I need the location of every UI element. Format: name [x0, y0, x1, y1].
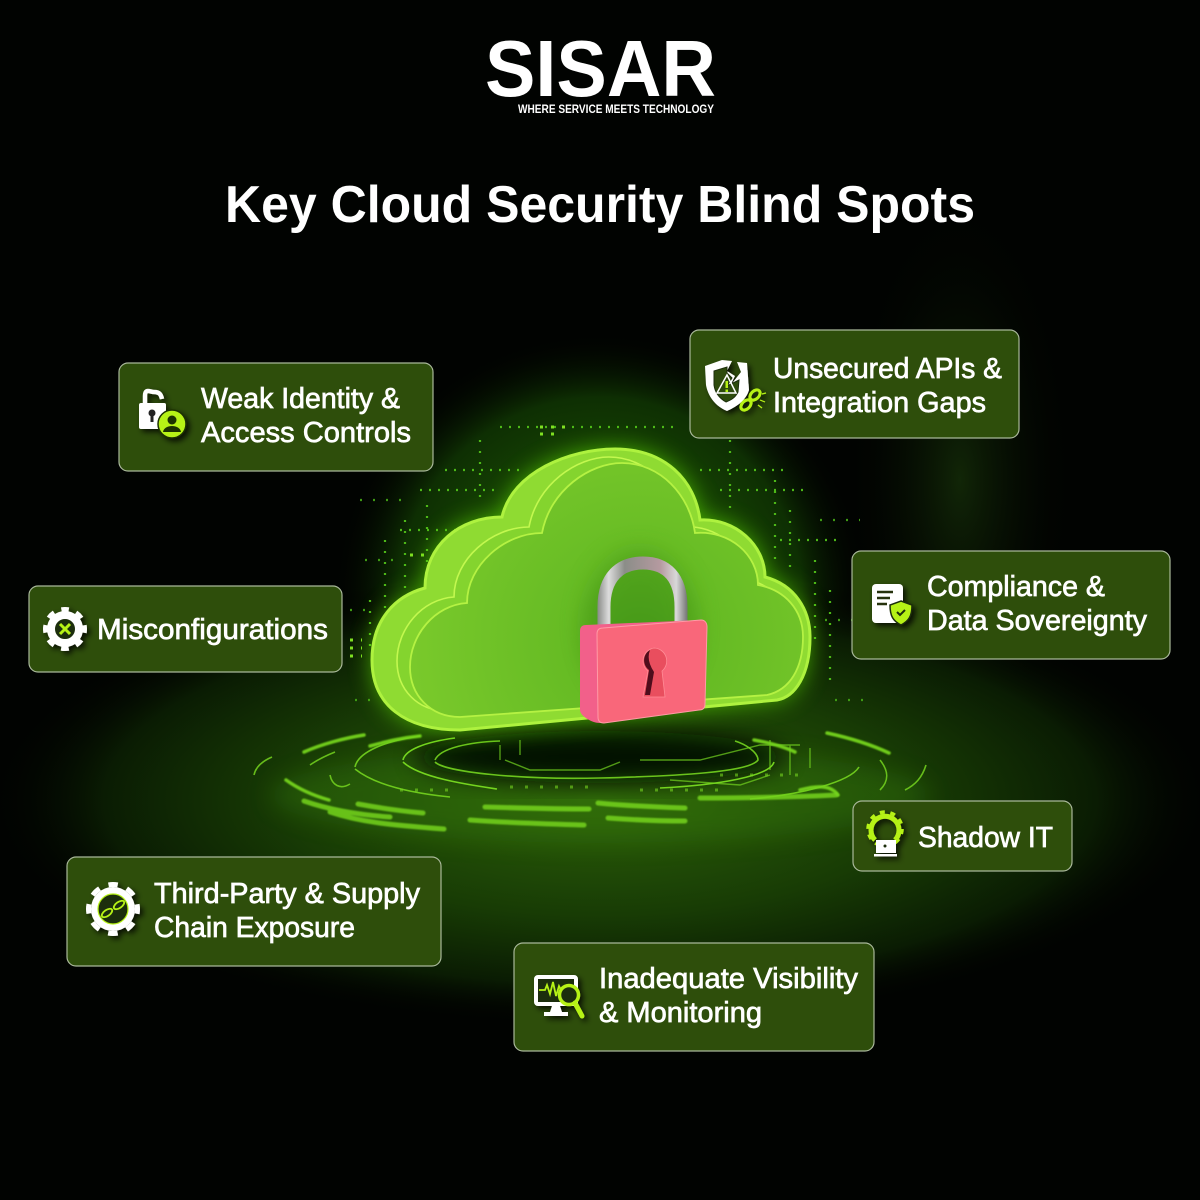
- text: Access Controls: [201, 417, 411, 449]
- text: [927, 571, 1147, 637]
- text: & Monitoring: [599, 997, 762, 1029]
- text: [201, 383, 411, 449]
- text: Unsecured APIs &: [773, 353, 1002, 385]
- keyhole: [643, 648, 667, 697]
- circuit rings: [254, 731, 930, 843]
- panel: misconfigurations: [29, 586, 342, 672]
- panel: compliance: [852, 551, 1170, 659]
- panel: shadow IT: [853, 801, 1072, 871]
- text: [773, 353, 1002, 419]
- text: Chain Exposure: [154, 912, 355, 944]
- text: Compliance &: [927, 571, 1105, 603]
- icon: cracked shield with broken chain: [705, 360, 766, 412]
- icon: gear with chain: [88, 884, 138, 934]
- text: Shadow IT: [918, 822, 1053, 854]
- cloud glow: [372, 449, 810, 730]
- icon: document with shield: [872, 584, 912, 625]
- text: Third-Party & Supply: [154, 878, 420, 910]
- icon: gear bulb with laptop: [868, 812, 902, 856]
- text: Inadequate Visibility: [599, 963, 858, 995]
- logo: SISAR: SISAR: [485, 24, 716, 113]
- panel: visibility: [514, 943, 874, 1051]
- padlock: [580, 550, 707, 723]
- text: Data Sovereignty: [927, 605, 1147, 637]
- panel: third-party: [67, 857, 441, 966]
- icon: gear with x: [46, 610, 84, 648]
- logo: SISAR: WHERE SERVICE MEETS TECHNOLOGY: [518, 104, 714, 116]
- data particles: [350, 427, 870, 700]
- text: [154, 878, 420, 944]
- text: Integration Gaps: [773, 387, 986, 419]
- icon: monitor with magnifier: [536, 977, 582, 1016]
- panel: unsecured APIs: [690, 330, 1019, 438]
- icon: open lock with user: [139, 391, 186, 438]
- panel: weak identity: [119, 363, 433, 471]
- text: Misconfigurations: [97, 614, 328, 646]
- text: Weak Identity &: [201, 383, 400, 415]
- text: [599, 963, 858, 1029]
- title: Key Cloud Security Blind Spots: [225, 176, 975, 234]
- cloud: [372, 449, 810, 730]
